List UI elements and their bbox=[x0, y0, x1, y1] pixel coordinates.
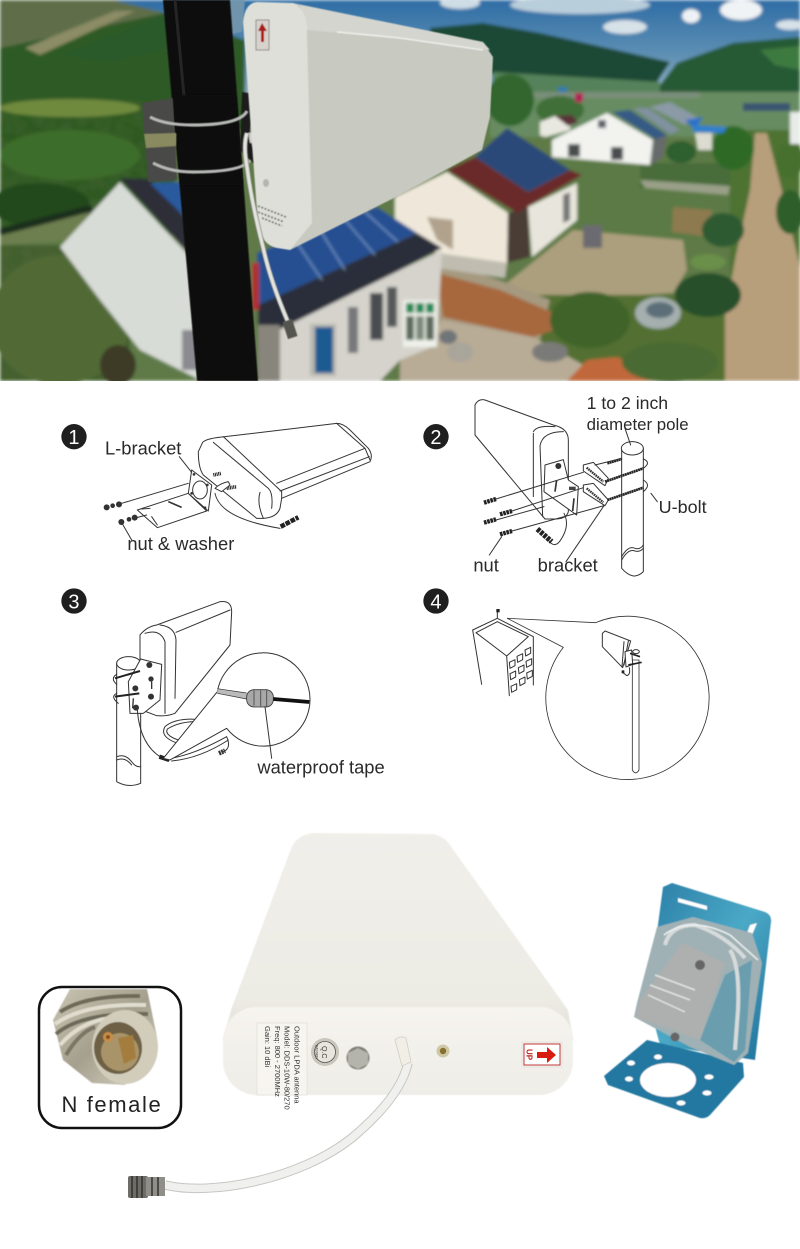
cable and connector bbox=[537, 513, 567, 545]
people in courtyard bbox=[583, 225, 602, 248]
number badge 3: 3 bbox=[68, 591, 80, 613]
left house bbox=[60, 182, 202, 381]
L-bracket drawing bbox=[137, 470, 212, 528]
step 4: mount on rooftop bbox=[423, 588, 709, 780]
panel: blue L-bracket with U-bolt kit bbox=[604, 883, 771, 1118]
leader lines bbox=[489, 428, 657, 562]
label: L-bracket: L-bracket bbox=[105, 437, 181, 458]
gold port bbox=[436, 1044, 450, 1058]
cable and connector bbox=[215, 493, 298, 528]
number badge 4 bbox=[423, 588, 449, 614]
pole bbox=[117, 657, 141, 785]
bracket with U-bolts bbox=[113, 659, 162, 758]
leader line bbox=[265, 707, 272, 758]
QC passed sticker: PASSED bbox=[314, 1045, 318, 1059]
plate holes bbox=[625, 898, 757, 1106]
spec label: Model: DDS-10W-80/270 bbox=[282, 1026, 292, 1110]
blurred village landscape background bbox=[0, 0, 800, 385]
coax cable with N connector bbox=[128, 1037, 411, 1198]
road bbox=[722, 130, 800, 381]
label: U-bolt: U-bolt bbox=[659, 497, 707, 517]
antenna drawing bbox=[198, 423, 371, 518]
number badge 2 bbox=[423, 424, 449, 449]
mounting brackets bbox=[142, 92, 254, 182]
shrubs bbox=[702, 213, 744, 247]
step 2: fix to pole bbox=[423, 393, 707, 576]
bricks bbox=[437, 273, 563, 337]
upright plate bbox=[648, 883, 771, 1060]
callout frame bbox=[39, 987, 181, 1128]
magnified circle with taped joint bbox=[163, 653, 310, 760]
antenna body bbox=[243, 2, 493, 250]
number badge 2: 2 bbox=[430, 427, 442, 449]
plastic bag bbox=[634, 917, 762, 1065]
antenna end face bbox=[223, 1007, 573, 1095]
bolts, nuts and connecting lines bbox=[484, 472, 604, 534]
spec label: Gain: 10 dBi bbox=[263, 1026, 272, 1068]
U-bolts bbox=[150, 111, 250, 172]
panel: rooftop antenna photo bbox=[0, 0, 800, 385]
number badge 3 bbox=[61, 588, 87, 614]
step 1: attach L-bracket bbox=[61, 423, 371, 554]
mid house with solar roof bbox=[395, 172, 508, 263]
left hillside bbox=[0, 0, 245, 130]
forest left bbox=[0, 100, 175, 235]
number badge 1: 1 bbox=[68, 427, 80, 449]
small houses bbox=[540, 116, 570, 137]
UP sticker bbox=[522, 1042, 562, 1067]
label: N female: N female bbox=[62, 1092, 162, 1117]
bracket plate bbox=[544, 460, 578, 515]
house behind the pole, right side bbox=[278, 251, 444, 381]
red tape bbox=[252, 263, 259, 310]
sky strip between pole and antenna bbox=[228, 0, 245, 34]
label: waterproof tape: waterproof tape bbox=[256, 756, 385, 777]
bolts and nuts bbox=[104, 473, 237, 525]
coax cable with connector bbox=[245, 133, 298, 339]
panel: N female connector callout bbox=[39, 987, 181, 1128]
spec label bbox=[257, 1023, 307, 1110]
magnified circle bbox=[507, 616, 709, 780]
panel: antenna product photo bbox=[128, 833, 573, 1198]
pole lower cover for brackets bbox=[173, 95, 243, 185]
leader lines bbox=[123, 457, 192, 540]
spec label: Freq: 800 - 2700MHz bbox=[273, 1026, 282, 1097]
building drawing bbox=[473, 609, 533, 696]
valley fields bbox=[490, 92, 800, 137]
antenna drawing bbox=[140, 601, 232, 716]
up sticker on antenna bbox=[256, 20, 269, 50]
number badge 1 bbox=[61, 424, 87, 449]
antenna upper shell bbox=[223, 833, 573, 1040]
cable coil bbox=[159, 719, 229, 761]
ground bolt bbox=[346, 1046, 370, 1070]
distant mountains bbox=[430, 23, 670, 82]
courtyard bbox=[507, 230, 687, 300]
number badge 4: 4 bbox=[430, 591, 442, 613]
patio bbox=[400, 320, 587, 381]
mast with antenna bbox=[602, 631, 642, 773]
clamp plate bbox=[635, 943, 725, 1040]
pole bbox=[163, 0, 258, 381]
right strip bbox=[730, 129, 800, 275]
base plate bbox=[604, 1040, 744, 1118]
QC passed sticker bbox=[311, 1038, 339, 1066]
label: nut: nut bbox=[473, 555, 499, 576]
step 3: waterproof connection bbox=[61, 588, 385, 785]
label: diameter pole: diameter pole bbox=[587, 415, 689, 434]
connector photo bbox=[53, 989, 158, 1085]
clamp brackets and U-bolts bbox=[583, 458, 647, 506]
pole bbox=[621, 442, 643, 576]
label: nut & washer: nut & washer bbox=[127, 533, 234, 554]
QC passed sticker: Q.C bbox=[320, 1046, 327, 1058]
antenna drawing bbox=[475, 400, 568, 519]
U-bolts bbox=[665, 925, 745, 1050]
spec label: Outdoor LPDA antenna bbox=[292, 1026, 302, 1104]
UP sticker: UP bbox=[524, 1049, 534, 1061]
label: pole diameter: 1 to 2 inch bbox=[587, 393, 668, 413]
label: bracket: bracket bbox=[538, 555, 598, 576]
